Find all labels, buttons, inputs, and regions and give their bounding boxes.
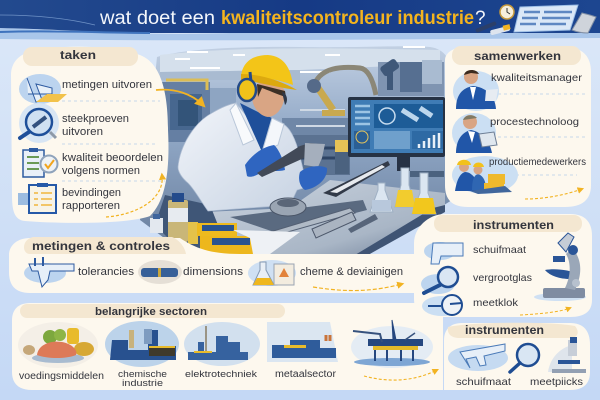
item: tolerancies bbox=[24, 257, 135, 287]
inspector coat bbox=[178, 103, 307, 211]
item: dimensions bbox=[138, 260, 244, 284]
heading: instrumenten: instrumenten bbox=[465, 325, 544, 337]
task: steekproeven uitvoren: steekproeven bbox=[62, 113, 129, 125]
tool: vergrootglas bbox=[510, 344, 539, 372]
panel: instrumenten (top) bbox=[414, 214, 592, 317]
bottles and yellow cases bbox=[150, 193, 253, 254]
arrow: dashed yellow bbox=[520, 308, 570, 315]
tool: schuifmaat bbox=[448, 344, 511, 388]
sector: voedingsmiddelen bbox=[18, 322, 104, 382]
panel: belangrijke sectoren bbox=[12, 303, 443, 390]
task: bevindingen rapporteren bbox=[18, 183, 121, 213]
person: kwaliteitsmanager: kwaliteitsmanager bbox=[491, 72, 583, 84]
task: metingen uitvoren bbox=[19, 74, 152, 104]
gloves and caliper bbox=[245, 143, 327, 190]
panel: instrumenten (bottom) bbox=[444, 323, 590, 390]
central scene: inspector in a factory bbox=[140, 46, 452, 255]
item: cheme & deviainigen: cheme & deviainigen bbox=[300, 266, 403, 278]
item: tolerancies: tolerancies bbox=[78, 266, 135, 278]
panel: metingen & controles bbox=[9, 237, 415, 293]
sector: chemische industrie bbox=[105, 321, 179, 389]
workbench bbox=[190, 180, 445, 255]
tool: schuifmaat bbox=[424, 242, 526, 264]
heading: taken bbox=[23, 47, 138, 66]
arrow: taken to scene bbox=[156, 90, 203, 105]
sector: elektrotechniek: elektrotechniek bbox=[185, 369, 257, 380]
heading: instrumenten bbox=[448, 323, 578, 338]
tool: microscope: meetpiicks bbox=[530, 376, 583, 388]
title: wat doet een bbox=[99, 8, 215, 29]
flasks bbox=[370, 168, 436, 214]
task: bevindingen rapporteren: rapporteren bbox=[62, 200, 120, 212]
hard hat bbox=[241, 55, 293, 85]
arrow: dashed yellow bbox=[525, 189, 582, 199]
tool: meetklok bbox=[422, 295, 519, 316]
task: steekproeven uitvoren: uitvoren bbox=[62, 126, 103, 138]
heading: samenwerken: samenwerken bbox=[474, 49, 561, 63]
sector: metaalsector bbox=[267, 322, 338, 380]
person: productiemedewerkers bbox=[452, 156, 586, 194]
person: kwaliteitsmanager bbox=[453, 70, 583, 111]
heading: belangrijke sectoren: belangrijke sectoren bbox=[95, 306, 207, 318]
heading: metingen & controles bbox=[24, 237, 186, 254]
person: procestechnoloog bbox=[452, 113, 579, 153]
task: metingen uitvoren: metingen uitvoren bbox=[62, 79, 152, 91]
computer monitor bbox=[348, 97, 445, 171]
tool: schuifmaat: schuifmaat bbox=[456, 376, 511, 388]
person: procestechnoloog: procestechnoloog bbox=[490, 116, 579, 128]
sector: chemische industrie: industrie bbox=[122, 378, 163, 389]
dark area beneath coat bbox=[155, 195, 230, 255]
heading: samenwerken bbox=[452, 46, 581, 65]
sector: metaalsector: metaalsector bbox=[275, 369, 337, 380]
heading: instrumenten: instrumenten bbox=[473, 218, 554, 232]
task: bevindingen rapporteren: bevindingen bbox=[62, 187, 121, 199]
task: steekproeven uitvoren bbox=[19, 103, 129, 143]
item: dimensions: dimensions bbox=[183, 266, 244, 278]
arrow: curved yellow bbox=[106, 175, 162, 217]
icon: microscope bbox=[534, 233, 586, 301]
heading: belangrijke sectoren bbox=[20, 304, 285, 318]
task: kwaliteit beoordelen bbox=[23, 148, 163, 177]
sector: offshore platform bbox=[351, 320, 433, 368]
sector: chemische industrie: chemische bbox=[118, 369, 167, 380]
arrow: dashed to solid yellow bbox=[313, 284, 402, 291]
header banner: kwaliteitscontroleur industrie bbox=[221, 8, 474, 29]
header banner bbox=[0, 0, 600, 40]
header banner: ? bbox=[475, 8, 486, 29]
tool: meetklok: meetklok bbox=[473, 297, 519, 309]
arrow: dashed yellow bbox=[364, 370, 437, 380]
item: cheme & deviainigen bbox=[248, 260, 403, 286]
metal parts on the bench bbox=[230, 198, 378, 238]
factory background bbox=[160, 47, 444, 177]
clipboard bbox=[323, 161, 390, 197]
heading: instrumenten bbox=[434, 215, 582, 232]
person: productiemedewerkers: productiemedewerkers bbox=[489, 157, 586, 168]
task: kwaliteit beoordelen: volgens normen bbox=[62, 165, 140, 177]
panel: taken bbox=[11, 47, 168, 223]
head bbox=[252, 81, 285, 117]
tool: vergrootglas bbox=[421, 267, 532, 294]
ear muff bbox=[238, 72, 256, 101]
heading: taken: taken bbox=[60, 48, 96, 62]
panel: samenwerken bbox=[445, 46, 591, 207]
task: kwaliteit beoordelen: kwaliteit beoordelen bbox=[62, 152, 163, 164]
sector: voedingsmiddelen: voedingsmiddelen bbox=[19, 371, 104, 382]
tool: vergrootglas: vergrootglas bbox=[473, 272, 532, 284]
icon: stopwatch, document and tools bbox=[475, 5, 596, 35]
heading: metingen & controles: metingen & controles bbox=[32, 239, 170, 253]
tool: microscope bbox=[530, 337, 586, 388]
sector: elektrotechniek bbox=[184, 322, 260, 380]
tool: schuifmaat: schuifmaat bbox=[473, 244, 526, 256]
